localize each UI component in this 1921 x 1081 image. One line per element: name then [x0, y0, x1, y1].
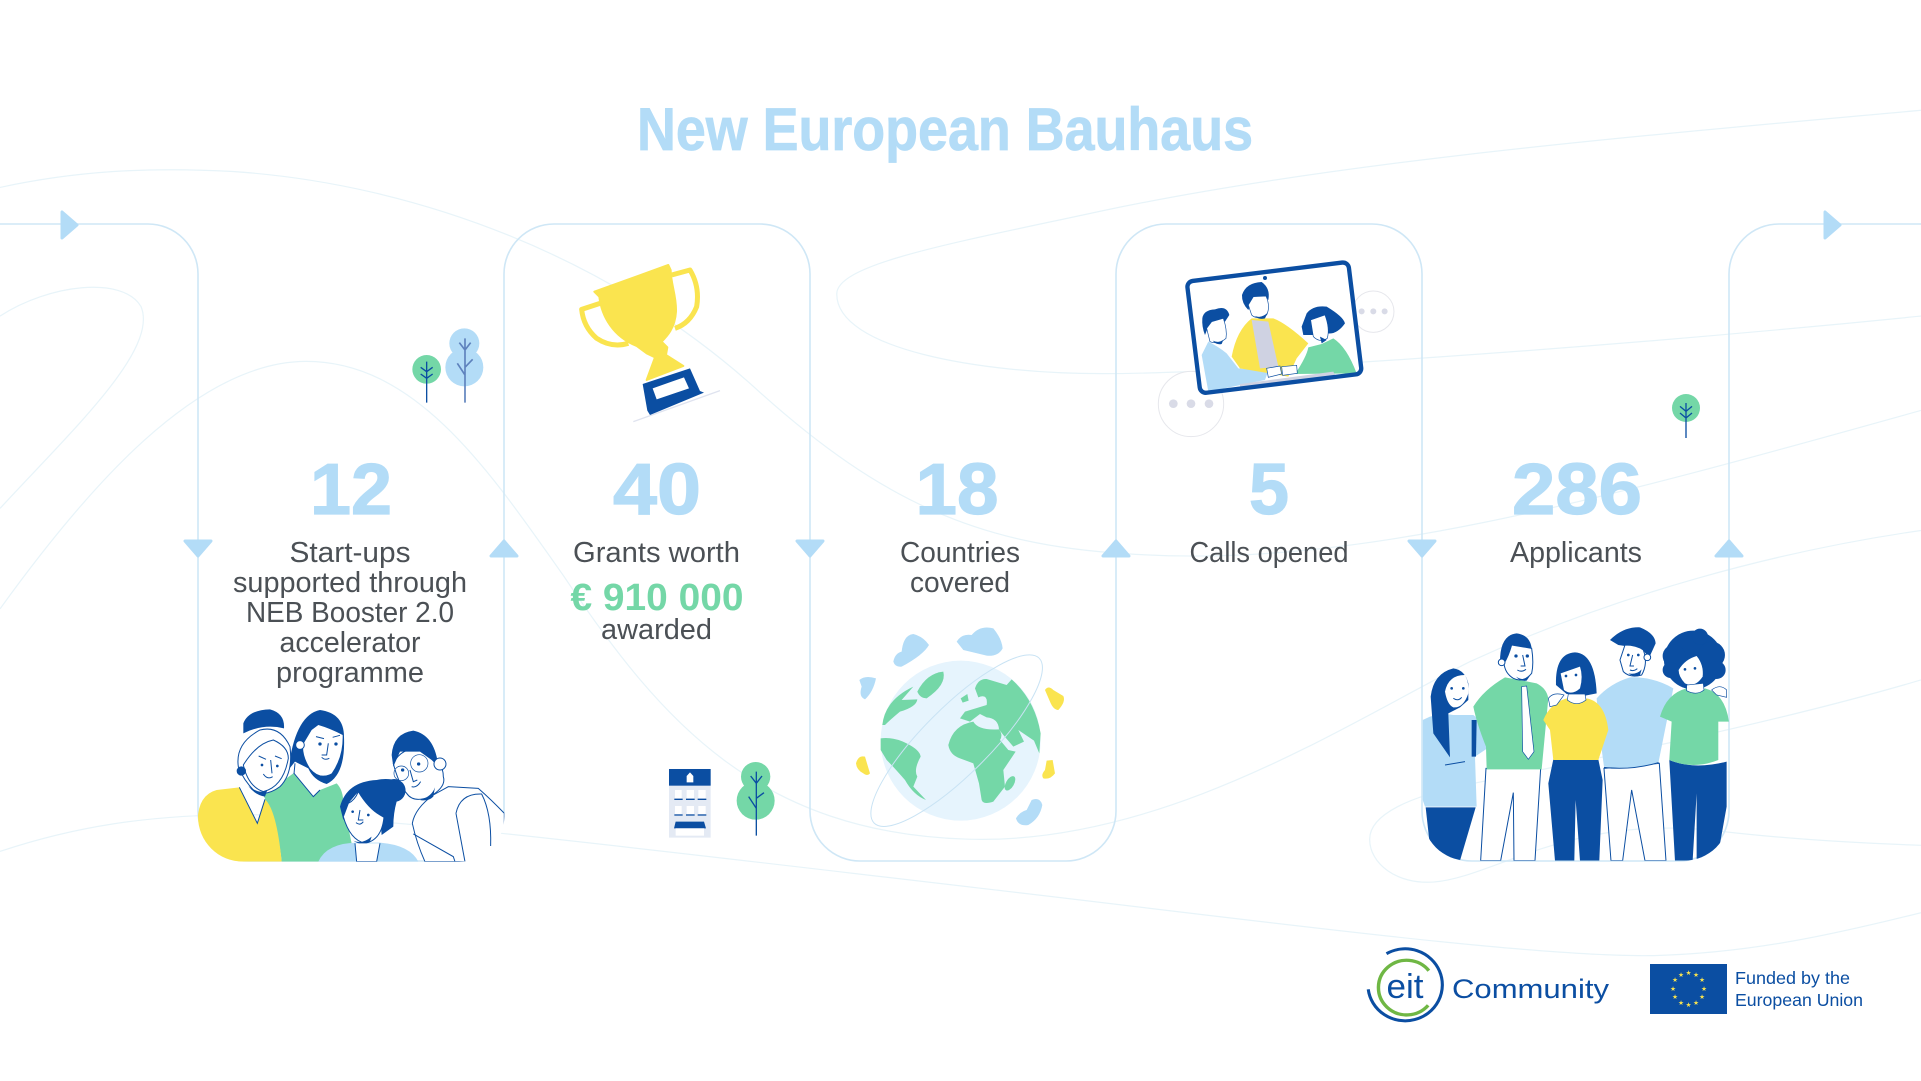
text: countries description: Countries: [900, 537, 1020, 569]
text: start-ups description: accelerator: [280, 627, 421, 659]
icon: tree: [737, 762, 775, 836]
man with tie: [1473, 633, 1548, 861]
centre woman: [1543, 652, 1608, 861]
panel: calls: [1158, 262, 1394, 569]
text: grants description: awarded: [601, 614, 712, 646]
logo: EU flag with funding text: ★: [1670, 985, 1676, 993]
panel: start-ups: [198, 328, 504, 862]
serpentine path with arrows: [0, 212, 1921, 861]
illustration: group of applicants: [1423, 627, 1729, 861]
logo: EIT Community: Community: [1452, 974, 1610, 1004]
icon: small tree: [1672, 394, 1700, 438]
illustration: video call: [1158, 262, 1394, 437]
far-left woman: [1423, 668, 1487, 861]
logo: EU flag with funding text: ★: [1678, 971, 1684, 979]
text: countries description: covered: [910, 567, 1010, 599]
logo: EU flag with funding text: [1650, 964, 1863, 1014]
logo: EU flag with funding text: ★: [1672, 993, 1678, 1001]
logo: EU flag with funding text: European Union: [1735, 990, 1863, 1010]
icon: trophy: [582, 265, 720, 422]
man in blue: [1597, 627, 1673, 861]
stat: 286: 286: [1512, 450, 1642, 530]
icon: trees: [412, 328, 483, 403]
text: grants description: Grants worth: [573, 537, 740, 569]
stat: 18: 18: [916, 450, 998, 530]
logo: EU flag with funding text: ★: [1678, 999, 1684, 1007]
title: New European Bauhaus: [637, 96, 1253, 163]
logo: EU flag with funding text: ★: [1693, 971, 1699, 979]
text: start-ups description: supported through: [233, 567, 467, 599]
logo: EU flag with funding text: ★: [1699, 993, 1705, 1001]
text: grants description: [570, 537, 744, 646]
logo: EIT Community: eit: [1386, 968, 1424, 1006]
logo: EU flag with funding text: ★: [1701, 985, 1707, 993]
text: grants description: € 910 000: [570, 577, 744, 619]
logo: EIT Community: [1368, 949, 1610, 1021]
logo: EU flag with funding text: ★: [1686, 1001, 1692, 1009]
illustration: globe: [851, 627, 1064, 847]
text: countries description: [900, 537, 1020, 599]
panel: countries: [851, 450, 1064, 847]
logo: EU flag with funding text: ★: [1686, 969, 1692, 977]
stat: 5: 5: [1249, 450, 1289, 530]
icon: building: [669, 769, 711, 838]
panel: grants: [570, 265, 775, 838]
logo: EU flag with funding text: ★: [1672, 976, 1678, 984]
illustration: family group: [198, 709, 504, 862]
right woman: [1660, 629, 1729, 861]
text: start-ups description: Start-ups: [290, 537, 410, 569]
text: start-ups description: programme: [276, 657, 424, 689]
logo: EU flag with funding text: Funded by the: [1735, 968, 1850, 988]
stat: 12: 12: [310, 450, 392, 530]
text: calls description: Calls opened: [1190, 537, 1348, 569]
logo: EU flag with funding text: ★: [1699, 976, 1705, 984]
text: applicants description: Applicants: [1510, 537, 1642, 569]
logo: EU flag with funding text: ★: [1693, 999, 1699, 1007]
text: start-ups description: [233, 537, 467, 689]
panel: applicants: [1423, 394, 1729, 861]
stat: 40: 40: [613, 450, 701, 530]
text: start-ups description: NEB Booster 2.0: [246, 597, 454, 629]
